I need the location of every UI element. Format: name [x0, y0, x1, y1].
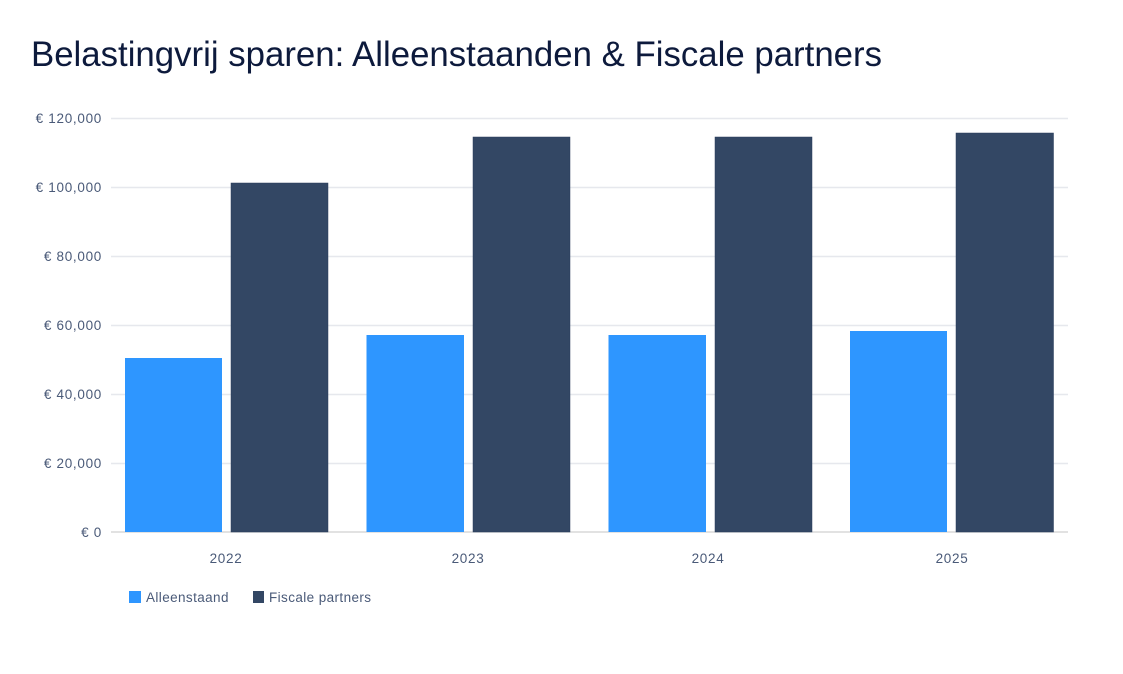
x axis labels: 2024	[692, 551, 724, 566]
y axis labels: € 60,000	[44, 318, 102, 333]
title: Belastingvrij sparen: Alleenstaanden & Fiscale partners	[31, 35, 882, 74]
x axis labels: 2025	[936, 551, 968, 566]
y axis labels: € 40,000	[44, 387, 102, 402]
y axis labels: € 0	[81, 525, 102, 540]
bars 2025	[850, 133, 1054, 532]
y axis labels: € 20,000	[44, 456, 102, 471]
legend: Fiscale partners: Fiscale partners	[269, 590, 371, 605]
x axis labels: 2023	[452, 551, 484, 566]
y axis labels: € 80,000	[44, 249, 102, 264]
legend	[129, 590, 371, 605]
y axis labels: € 120,000	[36, 111, 102, 126]
bar chart	[125, 133, 1054, 532]
y axis labels	[36, 111, 102, 540]
x axis labels	[210, 551, 968, 566]
bars 2022	[125, 183, 328, 532]
bars 2023	[366, 137, 570, 532]
y axis labels: € 100,000	[36, 180, 102, 195]
x axis labels: 2022	[210, 551, 242, 566]
legend: Alleenstaand: Alleenstaand	[146, 590, 229, 605]
bars 2024	[608, 137, 812, 532]
